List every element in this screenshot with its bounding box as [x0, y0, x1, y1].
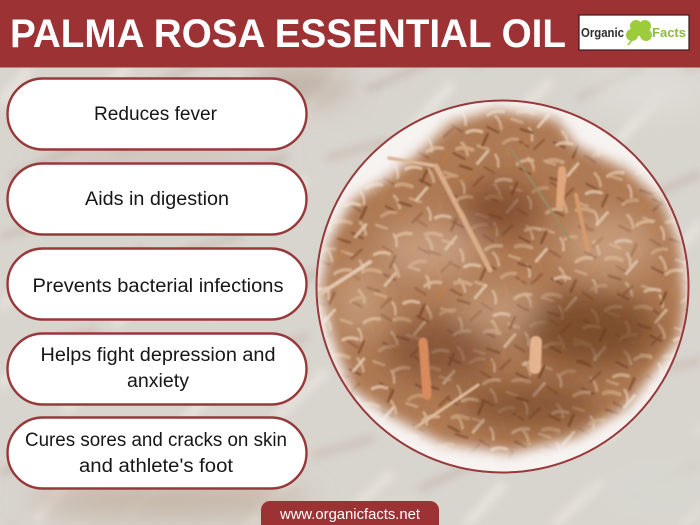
pill: Cures sores and cracks on skin and athlete's foot: and athlete's foot: [79, 456, 234, 477]
pill: Reduces fever: Reduces fever: [94, 104, 218, 125]
pill: Reduces fever: [8, 78, 306, 150]
pill: Prevents bacterial infections: [8, 248, 306, 320]
header banner: [0, 0, 700, 68]
pill: Prevents bacterial infections: Prevents bacterial infections: [32, 276, 284, 297]
large straw pieces: [320, 148, 588, 428]
title: PALMA ROSA ESSENTIAL OIL: [10, 12, 566, 56]
pill: Aids in digestion: Aids in digestion: [85, 189, 229, 210]
pill: Helps fight depression and anxiety: anxiety: [127, 371, 190, 392]
footer: website tab: www.organicfacts.net: [279, 507, 420, 523]
pill: Helps fight depression and anxiety: [8, 334, 306, 404]
pill: Helps fight depression and anxiety: Helps fight depression and: [40, 345, 276, 366]
pill: Cures sores and cracks on skin and athlete's foot: [8, 418, 306, 488]
logo: Organic Facts: [579, 15, 689, 50]
icon: green clover: [626, 20, 652, 45]
photo circle: palmarosa grass pile: [316, 100, 690, 474]
logo: Organic Facts: Organic: [581, 26, 624, 40]
grass pile with feathered edge: [316, 100, 690, 474]
pill: Aids in digestion: [8, 164, 306, 234]
pill: Cures sores and cracks on skin and athlete's foot: Cures sores and cracks on skin: [25, 430, 287, 451]
logo: Organic Facts: Facts: [652, 26, 686, 40]
footer: website tab: [261, 501, 439, 525]
